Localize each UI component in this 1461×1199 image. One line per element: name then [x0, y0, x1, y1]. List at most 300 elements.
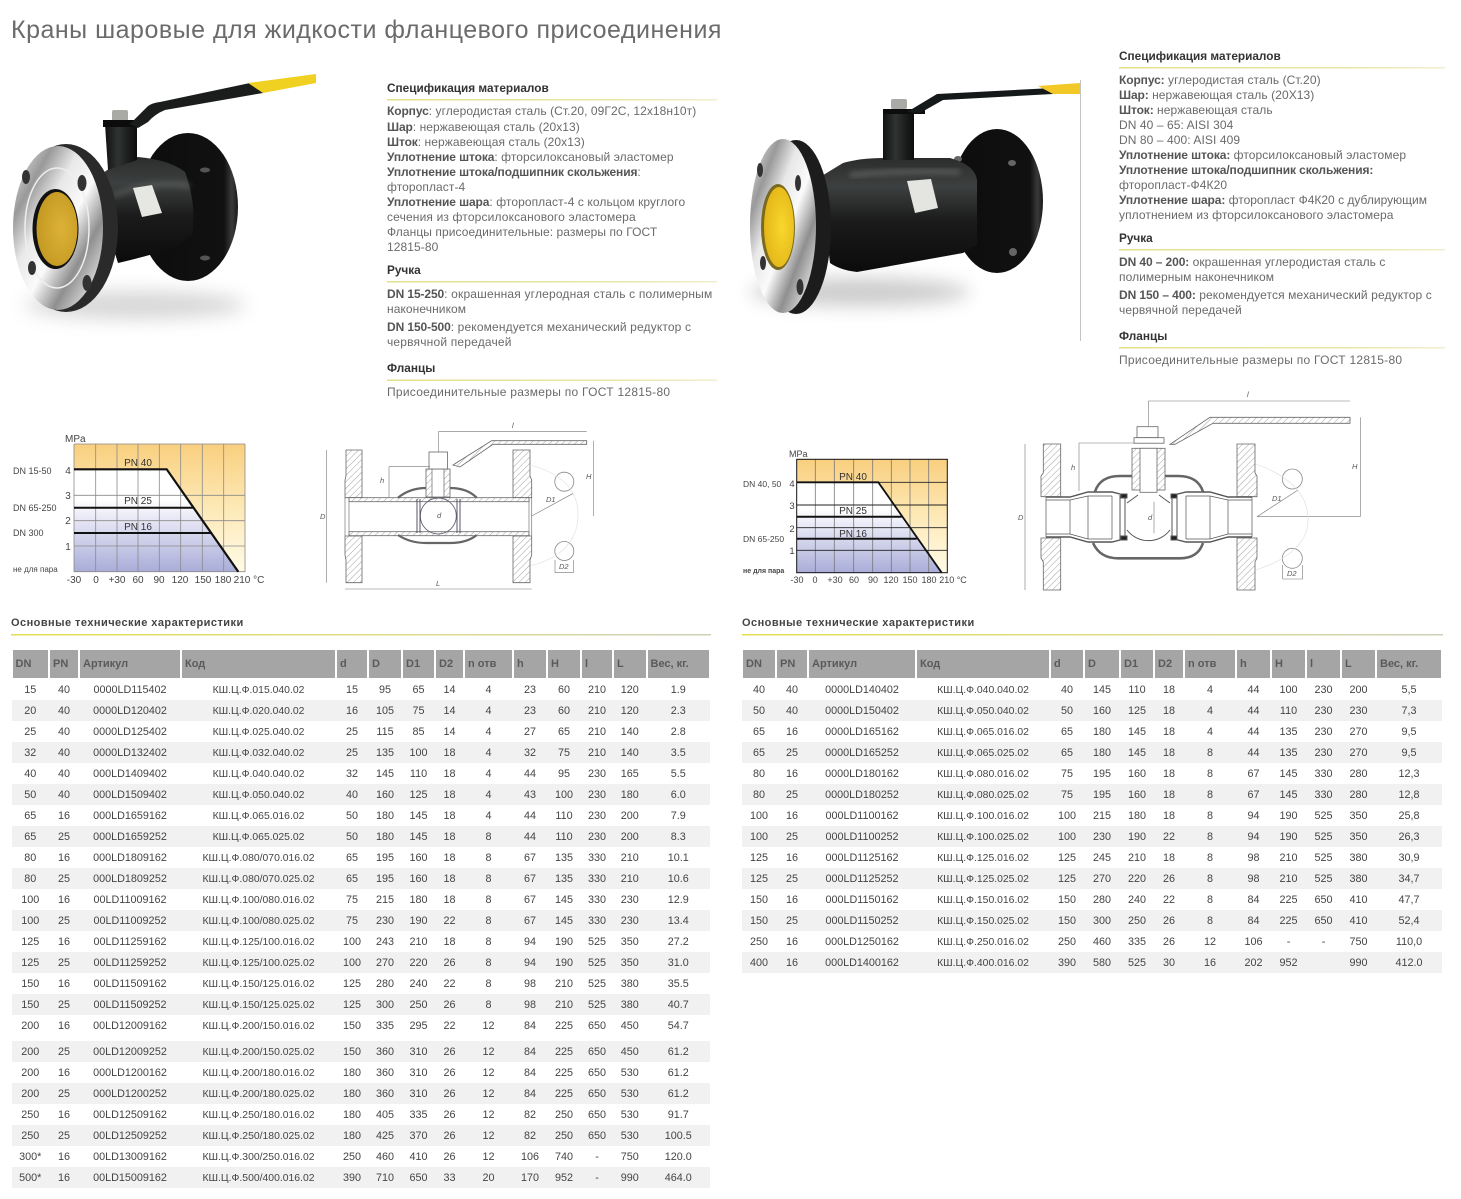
table rows: 140 — [621, 747, 639, 759]
table rows: 40 — [346, 789, 358, 801]
table rows: 25 — [58, 873, 70, 885]
table rows: 16 — [786, 726, 798, 738]
bolt circles — [555, 472, 574, 560]
dimension labels: l — [1247, 390, 1249, 399]
table rows: 135 — [376, 747, 394, 759]
table rows: 22 — [443, 915, 456, 927]
table rows: 16 — [786, 852, 798, 864]
table rows: 000LD1200162 — [93, 1067, 167, 1079]
table rows: 23 — [524, 684, 536, 696]
table rows: 30 — [1163, 957, 1175, 969]
table rows: 14 — [443, 726, 456, 738]
table rows: 370 — [409, 1130, 428, 1142]
table rows: 40 — [58, 726, 70, 738]
table rows: 18 — [443, 894, 456, 906]
DN labels: не для пара — [13, 565, 58, 574]
pipe — [349, 498, 529, 536]
table rows: 44 — [524, 810, 536, 822]
table rows: 16 — [346, 705, 358, 717]
y axis labels: 2 — [65, 516, 71, 527]
table rows: 225 — [555, 1046, 573, 1058]
table rows: 18 — [443, 810, 456, 822]
y axis labels: 3 — [65, 491, 71, 502]
handle text: DN 150-500: рекомендуется механический редуктор с — [387, 320, 691, 334]
table rows: 110 — [1128, 684, 1146, 696]
table rows: 200 — [621, 810, 639, 822]
table rows: 190 — [1279, 831, 1298, 843]
table rows: 5,5 — [1401, 684, 1416, 696]
bolt holes — [22, 170, 92, 291]
table rows: 25 — [58, 1046, 70, 1058]
table rows: - — [1287, 936, 1290, 948]
yellow grip — [1038, 83, 1080, 94]
table rows: 32 — [24, 747, 36, 759]
DN labels: DN 65-250 — [743, 534, 784, 544]
table rows: 8 — [1207, 915, 1213, 927]
table rows: 18 — [1163, 852, 1175, 864]
table rows: 180 — [343, 1067, 361, 1079]
curve labels: PN 40 — [124, 458, 152, 469]
table rows: 65 — [412, 684, 424, 696]
y axis labels: 2 — [789, 524, 795, 535]
specification text: Корпус: углеродистая сталь (Ст.20) — [1119, 73, 1321, 87]
table rows: 0000LD140402 — [825, 684, 899, 696]
table rows: 16 — [58, 852, 70, 864]
table rows: 000LD1409402 — [93, 768, 167, 780]
table rows: 84 — [1247, 915, 1260, 927]
back flange — [951, 129, 1043, 273]
table rows: 4 — [485, 705, 492, 717]
table rows: 525 — [588, 999, 606, 1011]
shell — [1093, 476, 1203, 558]
specification text — [1119, 73, 1427, 222]
specification text: Корпус: углеродистая сталь (Ст.20, 09Г2С, 12х18н10т) — [387, 104, 696, 118]
table rows: 16 — [58, 1067, 70, 1079]
table rows: 18 — [443, 873, 456, 885]
table rows: 110 — [555, 810, 573, 822]
table rows: 8 — [1207, 768, 1213, 780]
table rows: 180 — [1093, 747, 1111, 759]
grid — [74, 444, 245, 572]
plot background — [797, 459, 947, 573]
table rows: 120 — [621, 705, 639, 717]
table rows: 18 — [1163, 789, 1175, 801]
handle text: наконечником — [387, 302, 466, 316]
bore — [32, 189, 78, 269]
table rows: 84 — [524, 1088, 536, 1100]
table rows: 380 — [1349, 852, 1368, 864]
table rows: 0000LD132402 — [93, 747, 167, 759]
table rows: 412.0 — [1395, 957, 1423, 969]
table rows: 25 — [58, 957, 70, 969]
table rows: 25 — [786, 873, 798, 885]
table rows: 15 — [24, 684, 36, 696]
x axis labels: -30 — [790, 575, 804, 585]
table rows: 5.5 — [671, 768, 686, 780]
x axis labels: +30 — [109, 575, 126, 586]
table rows: 210 — [409, 936, 428, 948]
handle text: DN 15-250: окрашенная углеродная сталь с полимерным — [387, 287, 712, 301]
table rows: 22 — [1163, 831, 1175, 843]
dimension labels: D — [1018, 513, 1024, 522]
table rows: 98 — [1247, 852, 1260, 864]
dimension labels: l — [512, 421, 514, 430]
table rows: 245 — [1093, 852, 1111, 864]
table rows: 500* — [19, 1172, 41, 1184]
table rows: 16 — [58, 1151, 70, 1163]
table rows: КШ.Ц.Ф.100.016.02 — [937, 811, 1029, 822]
table rows: 330 — [588, 894, 606, 906]
handle text — [387, 287, 712, 349]
table rows: 65 — [753, 747, 765, 759]
table rows: 150 — [750, 894, 768, 906]
table rows: 295 — [409, 1020, 428, 1032]
table rows: 94 — [524, 957, 536, 969]
table rows: 300 — [1093, 915, 1111, 927]
dimension labels — [320, 421, 592, 588]
table rows: 40.7 — [668, 999, 689, 1011]
table rows: 100 — [343, 957, 361, 969]
front flange edge — [14, 144, 118, 312]
table rows: 35.5 — [668, 978, 689, 990]
y axis labels — [65, 434, 86, 553]
table rows: 243 — [376, 936, 394, 948]
table rows: 210 — [1279, 873, 1298, 885]
table rows: 65 — [346, 873, 358, 885]
table rows: 100 — [750, 831, 768, 843]
table rows: 106 — [1244, 936, 1262, 948]
dimension labels: D — [320, 512, 326, 521]
table rows: 0000LD150402 — [825, 705, 899, 717]
table rows: 61.2 — [668, 1046, 689, 1058]
table rows: 10.6 — [668, 873, 689, 885]
table rows: 12 — [482, 1109, 494, 1121]
table rows: 405 — [376, 1109, 394, 1121]
table rows: 54.7 — [668, 1020, 689, 1032]
table rows: 30,9 — [1398, 852, 1420, 864]
table rows: 12,3 — [1398, 768, 1420, 780]
ball and seats — [417, 498, 460, 534]
table rows: 525 — [588, 978, 606, 990]
table rows: 4 — [485, 789, 492, 801]
table rows: 225 — [555, 1067, 573, 1079]
dimension labels: D2 — [559, 562, 569, 571]
table rows: 125 — [21, 936, 39, 948]
table rows: 160 — [376, 789, 394, 801]
table rows: КШ.Ц.Ф.500/400.016.02 — [202, 1173, 315, 1184]
table rows: КШ.Ц.Ф.040.040.02 — [213, 769, 304, 780]
DN labels: DN 40, 50 — [743, 479, 782, 489]
table rows: 000LD1809162 — [93, 852, 167, 864]
table header: D — [1088, 658, 1096, 670]
table rows: 60 — [558, 684, 570, 696]
table rows: 000LD1250162 — [825, 936, 899, 948]
table rows: 135 — [555, 852, 573, 864]
table rows: 210 — [588, 747, 606, 759]
table rows: 94 — [1247, 810, 1260, 822]
table rows: КШ.Ц.Ф.300/250.016.02 — [202, 1152, 315, 1163]
table header: PN — [780, 658, 795, 670]
table rows: КШ.Ц.Ф.125.025.02 — [937, 874, 1029, 885]
table rows: 16 — [58, 978, 70, 990]
table rows: 00LD12009252 — [93, 1046, 167, 1058]
table rows: 50 — [753, 705, 765, 717]
table rows: 25 — [786, 831, 798, 843]
table rows: 425 — [376, 1130, 394, 1142]
table rows: 8 — [485, 831, 492, 843]
table rows: 20 — [482, 1172, 494, 1184]
safe operating area — [797, 482, 942, 573]
table rows: 145 — [1128, 747, 1146, 759]
specification text: сечения из фторсилоксанового эластомера — [387, 210, 636, 224]
table rows: 180 — [1128, 810, 1146, 822]
table rows: 26 — [443, 1130, 456, 1142]
table rows: 25 — [24, 726, 36, 738]
bore — [761, 184, 795, 270]
table rows: 95 — [379, 684, 391, 696]
table rows: 16 — [786, 810, 798, 822]
table rows: 67 — [524, 915, 536, 927]
table rows: 125 — [343, 978, 361, 990]
shadow — [25, 291, 245, 319]
table rows: 25 — [786, 789, 798, 801]
x axis labels: 150 — [902, 575, 918, 585]
table rows: 525 — [588, 957, 606, 969]
table rows: 75 — [1061, 768, 1073, 780]
handle — [1170, 417, 1350, 444]
table rows: 250 — [21, 1109, 39, 1121]
table rows: 40 — [58, 705, 70, 717]
table rows: 00LD11009162 — [93, 894, 167, 906]
x axis labels: 180 — [921, 575, 937, 585]
table rows: 44 — [1247, 726, 1260, 738]
table rows: КШ.Ц.Ф.150.025.02 — [937, 916, 1029, 927]
table rows: 150 — [343, 1020, 361, 1032]
table header: n отв — [468, 658, 496, 670]
table rows: 12 — [482, 1067, 494, 1079]
table rows: 145 — [1279, 789, 1298, 801]
table rows: 110,0 — [1396, 936, 1422, 948]
table rows: 15 — [346, 684, 358, 696]
table rows: 250 — [555, 1109, 573, 1121]
table rows: 75 — [346, 915, 358, 927]
table rows: 91.7 — [668, 1109, 689, 1121]
table rows: 18 — [1163, 810, 1175, 822]
handle text: полимерным наконечником — [1119, 270, 1274, 284]
PN curves — [797, 482, 942, 573]
table rows: 170 — [521, 1172, 539, 1184]
y axis labels: MPa — [65, 434, 86, 445]
table rows: 25 — [786, 747, 798, 759]
table rows: 0000LD165252 — [825, 747, 899, 759]
table rows: 145 — [409, 810, 428, 822]
table rows: 250 — [555, 1130, 573, 1142]
table rows: 98 — [524, 999, 536, 1011]
front flange edge — [761, 140, 831, 314]
table rows: 20 — [24, 705, 36, 717]
table rows: 360 — [376, 1067, 394, 1079]
table rows: 16 — [58, 1020, 70, 1032]
bolt holes — [757, 163, 804, 295]
table rows: 14 — [443, 684, 456, 696]
dimension labels: H — [586, 472, 592, 481]
table rows: 165 — [621, 768, 639, 780]
table rows: 190 — [555, 957, 573, 969]
valve body — [103, 157, 193, 263]
table rows: 145 — [555, 915, 573, 927]
table rows: 250 — [1128, 915, 1146, 927]
table rows: 16 — [58, 810, 70, 822]
table rows: 110 — [410, 768, 427, 780]
table rows: 460 — [1093, 936, 1111, 948]
y axis labels — [789, 449, 808, 557]
table rows: 44 — [1247, 705, 1260, 717]
table rows: 200 — [621, 831, 639, 843]
table rows: 330 — [1314, 789, 1332, 801]
nut — [429, 452, 448, 469]
table rows: 8 — [1207, 831, 1213, 843]
chart: right pressure-temperature — [743, 449, 967, 585]
flanges text: Присоединительные размеры по ГОСТ 12815-80 — [387, 385, 670, 399]
table rows: 26 — [443, 1088, 456, 1100]
specification text: Уплотнение штока/подшипник скольжения: — [387, 165, 641, 179]
table rows: 00LD13009162 — [93, 1151, 167, 1163]
yellow grip — [248, 74, 316, 93]
table rows: 00LD12509252 — [93, 1130, 167, 1142]
DN labels: DN 65-250 — [13, 503, 57, 513]
table rows: 100 — [1279, 684, 1298, 696]
table header: d — [340, 658, 347, 670]
DN labels: DN 300 — [13, 528, 44, 538]
heading: right technical characteristics: Основные технические характеристики — [742, 617, 975, 629]
dimension labels: H — [1352, 462, 1358, 471]
y axis labels: MPa — [789, 449, 808, 459]
table rows: 16 — [58, 1172, 70, 1184]
table rows: 310 — [409, 1088, 428, 1100]
table rows: 160 — [409, 852, 428, 864]
table rows: 225 — [1279, 915, 1298, 927]
table rows: 210 — [555, 978, 573, 990]
y axis labels: 1 — [65, 542, 71, 553]
handle — [907, 88, 1053, 113]
table rows: 33 — [443, 1172, 456, 1184]
table rows: 12 — [482, 1020, 494, 1032]
table rows: 180 — [621, 789, 639, 801]
table rows: 525 — [1128, 957, 1146, 969]
table rows: 000LD1400162 — [825, 957, 899, 969]
table rows: 50 — [1061, 705, 1073, 717]
table rows: 150 — [343, 1046, 361, 1058]
table rows: 65 — [24, 810, 36, 822]
table rows: 200 — [21, 1088, 39, 1100]
table rows: 650 — [588, 1067, 606, 1079]
back flange — [138, 133, 238, 281]
table rows: 40 — [786, 684, 798, 696]
heading: handle: Ручка — [387, 263, 421, 277]
body highlight — [112, 184, 190, 196]
table rows: 000LD1150252 — [825, 915, 899, 927]
table rows: 9,5 — [1401, 747, 1416, 759]
table rows: 650 — [1314, 915, 1332, 927]
table rows: 4 — [1207, 705, 1213, 717]
table rows: 000LD1809252 — [93, 873, 167, 885]
table rows: 250 — [750, 936, 768, 948]
table rows: 40 — [786, 705, 798, 717]
curve labels: PN 25 — [839, 506, 867, 517]
handle text — [1119, 255, 1432, 317]
table rows: 4 — [485, 768, 492, 780]
table header: H — [1275, 658, 1283, 670]
neck — [105, 124, 137, 170]
table rows: 750 — [1349, 936, 1368, 948]
table rows: 125 — [1128, 705, 1146, 717]
table rows: 000LD1659252 — [93, 831, 167, 843]
nut and collar — [1134, 427, 1164, 443]
table rows: 135 — [1279, 726, 1298, 738]
table rows: 000LD1509402 — [93, 789, 167, 801]
table rows: 270 — [1093, 873, 1111, 885]
table rows: 44 — [1247, 747, 1260, 759]
table rows: 25 — [786, 915, 798, 927]
nameplate — [907, 179, 938, 213]
table rows: 145 — [376, 768, 394, 780]
x axis labels: 180 — [215, 575, 232, 586]
table rows: 650 — [588, 1046, 606, 1058]
table rows: КШ.Ц.Ф.080.016.02 — [937, 769, 1029, 780]
table rows: 10.1 — [668, 852, 689, 864]
table rows: 00LD11509252 — [93, 999, 167, 1011]
y axis labels: 1 — [789, 546, 795, 557]
table rows: 125 — [750, 873, 768, 885]
table rows: 0000LD165162 — [825, 726, 899, 738]
table rows: 650 — [588, 1109, 606, 1121]
table rows: 000LD1125162 — [825, 852, 899, 864]
table rows: 26 — [443, 999, 456, 1011]
table rows: 84 — [1247, 894, 1260, 906]
table rows: 400 — [750, 957, 768, 969]
table rows: 65 — [346, 852, 358, 864]
specification text: Уплотнение шара: фторопласт-4 с кольцом круглого — [387, 195, 685, 209]
table rows: 12 — [482, 1151, 494, 1163]
table rows: 00LD11259252 — [93, 957, 167, 969]
table rows: 145 — [1279, 768, 1298, 780]
table rows: КШ.Ц.Ф.065.025.02 — [937, 748, 1029, 759]
table rows: 360 — [376, 1046, 394, 1058]
shell — [398, 488, 477, 543]
table rows: 44 — [1247, 684, 1260, 696]
curve labels: PN 16 — [839, 529, 867, 540]
table rows: 145 — [1128, 726, 1146, 738]
table rows: 23 — [524, 705, 536, 717]
heading: Спецификация материалов — [387, 81, 549, 95]
table rows: 3.5 — [671, 747, 686, 759]
table rows: 525 — [1314, 852, 1332, 864]
table rows: 180 — [409, 894, 428, 906]
table rows: 125 — [750, 852, 768, 864]
table rows: 300 — [376, 999, 394, 1011]
nameplate — [133, 185, 162, 217]
specification text: DN 80 – 400: AISI 409 — [1119, 133, 1240, 147]
x axis labels: 60 — [849, 575, 859, 585]
table rows: 80 — [753, 789, 765, 801]
table rows: 12 — [482, 1130, 494, 1142]
table rows: 150 — [1058, 915, 1076, 927]
heading: Спецификация материалов — [1119, 49, 1281, 63]
table rows: 330 — [588, 852, 606, 864]
table rows: 464.0 — [665, 1172, 692, 1184]
table rows: 390 — [343, 1172, 361, 1184]
table rows: 310 — [409, 1067, 428, 1079]
